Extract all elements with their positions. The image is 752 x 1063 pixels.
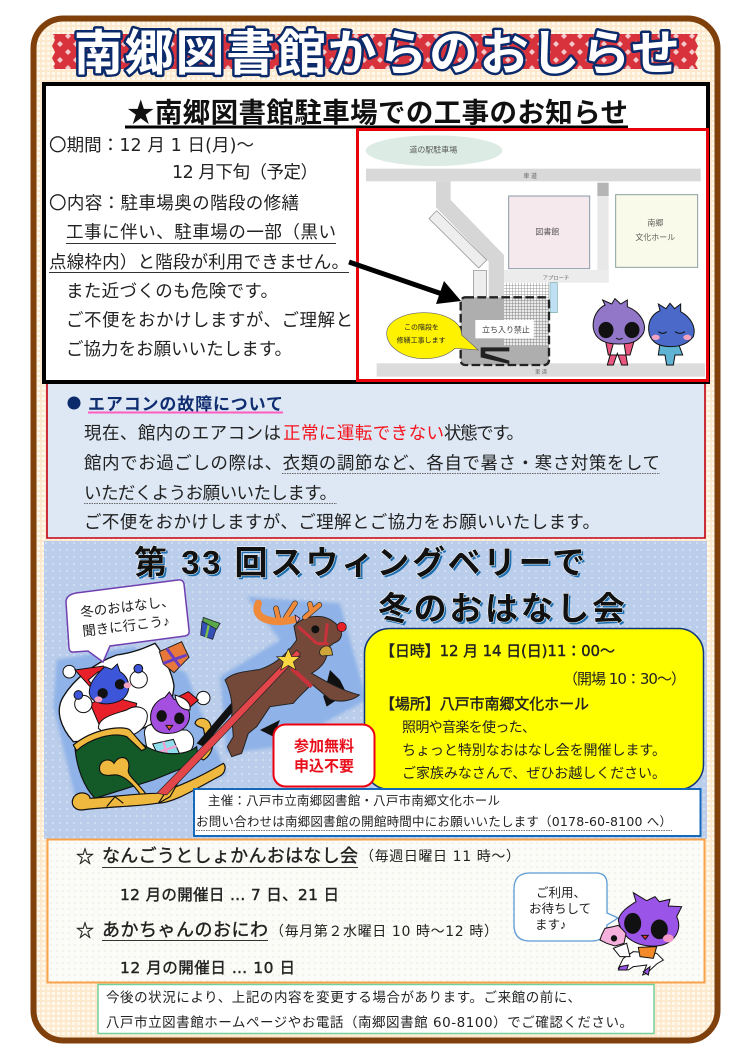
notice body text: ご不便をおかけしますが、ご理解と	[66, 311, 353, 331]
map labels: 車 道	[523, 172, 537, 180]
sack	[59, 643, 174, 742]
storytelling line 1	[76, 846, 520, 868]
notice heading: ★南郷図書館駐車場での工事のお知らせ	[127, 97, 628, 128]
event heading: 冬のおはなし会	[380, 592, 627, 629]
notice box: schedule changes: 八戸市立図書館ホームページやお電話（南郷図書館 60-8100）でご確認ください。	[106, 1015, 633, 1031]
reindeer	[225, 616, 359, 757]
notice box: schedule changes: 今後の状況により、上記の内容を変更する場合があります。ご来館の前に、	[106, 989, 581, 1006]
map labels: 南郷	[647, 217, 663, 227]
notice body text: ご協力をお願いいたします。	[66, 340, 292, 360]
body text: 館内でお過ごしの際は、衣類の調節など、各自で暑さ・寒さ対策をして	[84, 454, 660, 474]
schedule box: 【日時】12 月 14 日(日)11：00～	[380, 642, 615, 660]
panel: winter storytelling event	[44, 541, 707, 839]
event heading: 第 33 回スウィングベリーで	[136, 546, 587, 583]
gift: orange	[159, 642, 189, 673]
harness	[292, 623, 328, 687]
mascot: blue	[649, 303, 694, 365]
map of parking area	[358, 130, 708, 380]
schedule box: ちょっと特別なおはなし会を開催します。	[402, 743, 666, 759]
illustration: sleigh and reindeer	[53, 597, 367, 810]
notice body text: 〇期間：12 月 1 日(月)～	[49, 136, 254, 156]
blue mascot santa	[63, 664, 147, 740]
banner ribbon	[52, 34, 698, 69]
dates line 1: 12 月の開催日 … 7 日、21 日	[120, 886, 339, 904]
storytelling line 1: ☆	[76, 847, 94, 867]
map: roads and parking	[366, 135, 705, 377]
speech bubble: let's go: 聞きに行こう♪	[82, 613, 170, 639]
storytelling line 2: ☆	[76, 921, 94, 941]
storytelling line 2: （毎月第２水曜日 10 時～12 時）	[270, 923, 498, 940]
arrow: notice to construction zone	[349, 262, 461, 304]
event heading: 冬のおはなし会	[378, 590, 625, 627]
panel: regular storytelling	[48, 840, 704, 982]
map labels: 文化ホール	[635, 232, 675, 242]
organiser box: 主催：八戸市立南郷図書館・八戸市南郷文化ホール	[208, 793, 500, 808]
harness strap	[157, 650, 301, 795]
purple mascot santa	[144, 691, 210, 761]
storytelling line 1: なんごうとしょかんおはなし会	[102, 846, 358, 867]
schedule box: 【場所】八戸市南郷文化ホール	[380, 695, 589, 713]
organiser box	[194, 789, 700, 836]
map labels	[409, 145, 675, 375]
schedule box: 照明や音楽を使った、	[402, 719, 536, 736]
speech bubble: awaiting you: ご利用、	[536, 885, 586, 900]
notice body text: 12 月下旬（予定）	[172, 163, 318, 183]
mascot: purple	[593, 299, 644, 365]
body text: ご不便をおかけしますが、ご理解とご協力をお願いいたします。	[84, 513, 600, 533]
sleigh	[72, 718, 225, 810]
dates line 2: 12 月の開催日 … 10 日	[120, 959, 295, 977]
antlers	[257, 603, 319, 621]
speech bubble: awaiting you	[514, 873, 618, 941]
badge: free admission: 申込不要	[294, 758, 354, 775]
storytelling line 2: あかちゃんのおにわ	[102, 920, 268, 941]
organiser box: お問い合わせは南郷図書館の開館時間中にお願いいたします（0178-60-8100 へ）	[196, 814, 672, 829]
panel: parking construction notice	[44, 84, 708, 382]
notice body text: 点線枠内）と階段が利用できません。	[49, 253, 349, 273]
body text: いただくようお願いいたします。	[84, 484, 337, 504]
badge: free admission	[274, 724, 374, 786]
schedule box: （開場 10：30～）	[563, 670, 686, 688]
callout: stairs repair: 修繕工事します	[397, 336, 446, 345]
event heading: 第 33 回スウィングベリーで	[134, 544, 585, 581]
speech bubble: let's go	[66, 580, 189, 662]
speech bubble: let's go: 冬のおはなし、	[80, 594, 175, 620]
construction zone	[461, 297, 549, 365]
title text: 南郷図書館からのおしらせ	[74, 27, 680, 81]
map labels: 立ち入り禁止	[482, 324, 530, 334]
title banner	[52, 27, 698, 81]
schedule box	[364, 628, 704, 790]
map labels: 図書館	[535, 226, 559, 236]
panel: air conditioner	[47, 384, 705, 538]
bell	[319, 646, 333, 656]
schedule box: ご家族みなさんで、ぜひお越しください。	[402, 765, 666, 782]
glow	[53, 597, 367, 803]
callout: stairs repair: この階段を	[404, 322, 439, 331]
star	[277, 649, 300, 670]
notice body text: 工事に伴い、駐車場の一部（黒い	[66, 223, 336, 243]
body text: 正常に運転できない	[283, 424, 444, 444]
speech bubble: awaiting you: ます♪	[535, 918, 566, 932]
body text: 現在、館内のエアコンは	[84, 424, 281, 444]
notice body text: また近づくのも危険です。	[66, 282, 278, 302]
badge: free admission: 参加無料	[294, 737, 354, 755]
callout: stairs repair	[387, 313, 478, 359]
event heading	[134, 544, 627, 629]
speech bubble: awaiting you: お待ちして	[529, 902, 591, 916]
notice body text: 〇内容：駐車場奥の階段の修繕	[49, 194, 299, 214]
bullet and heading: エアコンの故障について	[88, 395, 283, 414]
reindeer legs shadow	[197, 670, 347, 747]
gift: blue	[201, 617, 220, 639]
map labels: アプローチ	[543, 275, 569, 282]
map labels: 車 道	[535, 367, 548, 375]
map labels: 道の駅駐車場	[409, 145, 457, 155]
body text	[84, 424, 660, 533]
storytelling line 2	[76, 920, 498, 941]
notice body text	[49, 136, 353, 360]
storytelling line 1: （毎週日曜日 11 時～）	[360, 849, 520, 865]
notice box: schedule changes	[98, 984, 654, 1034]
body text: 状態です。	[444, 424, 524, 444]
mascot with baby	[600, 893, 682, 975]
